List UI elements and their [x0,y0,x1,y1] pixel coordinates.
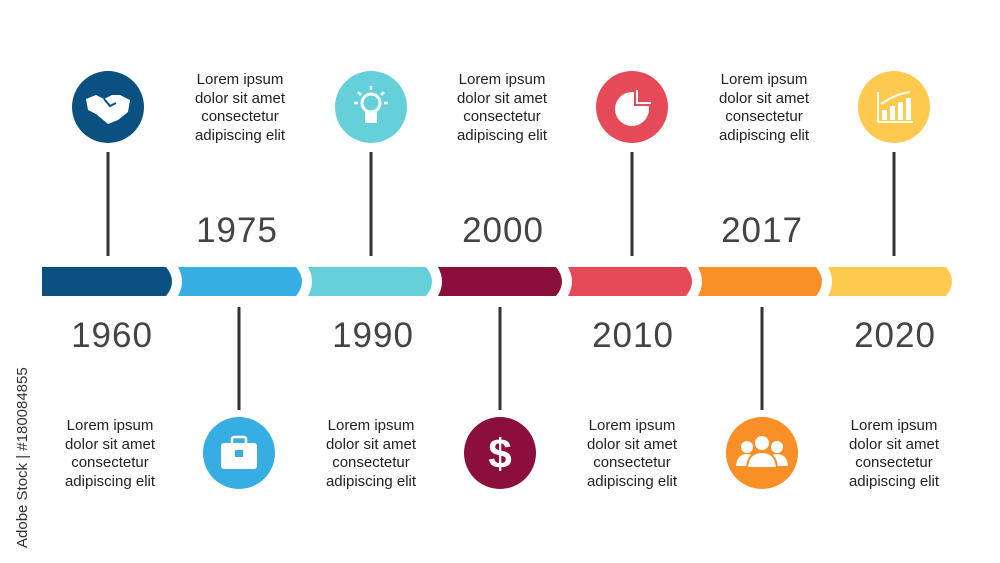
text: 1990: adipiscing elit [326,473,417,490]
text: 1975 [195,71,286,144]
icon: dollar: $ [488,430,512,477]
text: 1975: consectetur [201,108,279,125]
text: 2020 [849,417,940,490]
icon: bulb [335,71,407,143]
icon: pie chart [596,71,668,143]
text: 2020: adipiscing elit [849,473,940,490]
icon: dollar [464,417,536,489]
text: 2017: dolor sit amet [719,90,810,107]
text: 2020: Lorem ipsum [851,417,937,434]
watermark caption: Adobe Stock | #180084855 [14,367,31,548]
text: 1990: Lorem ipsum [328,417,414,434]
years: 2000 [462,211,544,250]
text: 2017: Lorem ipsum [721,71,807,88]
text: 2017: adipiscing elit [719,127,810,144]
years: 2020 [854,316,936,355]
icon: growth chart [858,71,930,143]
years: 2017 [721,211,803,250]
text: 2020: consectetur [855,454,933,471]
icon: briefcase [203,417,275,489]
text: 2010 [587,417,678,490]
icon: handshake [72,71,144,143]
text: 1960: consectetur [71,454,149,471]
years: 1960 [71,316,153,355]
text: 1975: Lorem ipsum [197,71,283,88]
timeline bar [42,267,952,296]
text: 2000: Lorem ipsum [459,71,545,88]
text: 2000: adipiscing elit [457,127,548,144]
text: 1990: consectetur [332,454,410,471]
text: 2017: consectetur [725,108,803,125]
text: 1960: Lorem ipsum [67,417,153,434]
text: 1960 [65,417,156,490]
years: 1990 [332,316,414,355]
text: 1990 [326,417,417,490]
text: 2010: consectetur [593,454,671,471]
text: 1975: dolor sit amet [195,90,286,107]
text: 2010: dolor sit amet [587,436,678,453]
text: 1975: adipiscing elit [195,127,286,144]
text: 2020: dolor sit amet [849,436,940,453]
text: 2017 [719,71,810,144]
text: 2010: Lorem ipsum [589,417,675,434]
text: 1960: adipiscing elit [65,473,156,490]
icon: people [726,417,798,489]
years: 1975 [196,211,278,250]
connector lines [108,152,894,410]
text: 1960: dolor sit amet [65,436,156,453]
years: 2010 [592,316,674,355]
text: 1990: dolor sit amet [326,436,417,453]
text: 2010: adipiscing elit [587,473,678,490]
text: 2000 [457,71,548,144]
text: 2000: consectetur [463,108,541,125]
text: 2000: dolor sit amet [457,90,548,107]
years [71,211,936,355]
